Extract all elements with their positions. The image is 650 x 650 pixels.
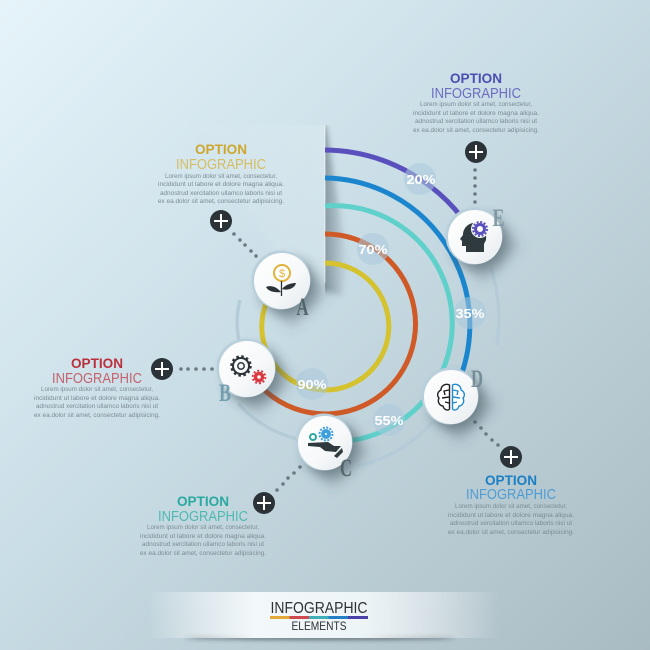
percent badge 90%: 90% — [298, 377, 327, 392]
text block E: INFOGRAPHIC — [431, 86, 521, 102]
text block C: INFOGRAPHIC — [158, 509, 248, 525]
plus button E — [465, 141, 487, 163]
text block B: adnostrud xercitation ullamco laboris nisi ut — [36, 403, 158, 410]
connector dots D — [473, 420, 500, 447]
banner colour bar — [270, 616, 368, 619]
icon: money plant: $ — [279, 268, 285, 280]
icon: gears — [232, 356, 265, 383]
node B — [216, 338, 296, 418]
letter E: E — [492, 205, 504, 232]
ring: blue — [325, 178, 470, 397]
percent badge 20%: 20% — [406, 172, 436, 187]
folded paper panel — [324, 125, 346, 296]
text block A: incididunt ut labore et dolore magna aliqua. — [158, 181, 284, 188]
text block A: adnostrud xercitation ullamco laboris nisi ut — [160, 190, 282, 197]
text block E: adnostrud xercitation ullamco laboris nisi ut — [415, 118, 537, 125]
text block E: OPTION — [450, 71, 502, 86]
node D — [422, 366, 498, 444]
ghost ring arcs — [237, 268, 499, 466]
text block C: adnostrud xercitation ullamco laboris nisi ut — [142, 541, 264, 548]
percent badge 70%: 70% — [358, 242, 388, 257]
banner title: INFOGRAPHIC — [270, 600, 368, 617]
text block B: Lorem ipsum dolor sit amet, consectetur, — [41, 386, 153, 393]
text block D: incididunt ut labore et dolore magna aliqua. — [448, 512, 574, 519]
letter D: D — [471, 366, 483, 393]
text block A: INFOGRAPHIC — [176, 157, 266, 173]
text block A: ex ea.dolor sit amet, consectetur adipisicing. — [158, 198, 284, 205]
text block B: INFOGRAPHIC — [52, 371, 142, 387]
text block E: Lorem ipsum dolor sit amet, consectetur, — [420, 101, 532, 108]
text block D: INFOGRAPHIC — [466, 487, 556, 503]
icon: brain — [438, 384, 464, 410]
ring: orange — [247, 234, 416, 414]
text block C: OPTION — [177, 494, 229, 509]
icon: hand with gears — [308, 428, 343, 458]
text block D: OPTION — [485, 473, 537, 488]
percent badge 35% — [454, 297, 486, 329]
text block A: Lorem ipsum dolor sit amet, consectetur, — [165, 173, 277, 180]
text block D — [448, 473, 574, 536]
percent badge 90% — [296, 368, 328, 400]
node C — [296, 414, 372, 490]
text block C: ex ea.dolor sit amet, consectetur adipisicing. — [140, 550, 266, 557]
text block B: incididunt ut labore et dolore magna aliqua. — [34, 395, 160, 402]
ring: purple — [325, 150, 475, 237]
text block D: adnostrud xercitation ullamco laboris nisi ut — [450, 520, 572, 527]
text block B — [34, 356, 160, 419]
text block E: ex ea.dolor sit amet, consectetur adipisicing. — [413, 127, 539, 134]
connector dots A — [232, 232, 258, 258]
text block E: incididunt ut labore et dolore magna aliqua. — [413, 110, 539, 117]
connector dots C — [275, 465, 302, 492]
node E — [446, 205, 522, 284]
text block E — [413, 71, 539, 134]
ring: yellow — [262, 263, 389, 390]
node A — [252, 250, 331, 330]
text block A — [158, 142, 284, 205]
text block D: Lorem ipsum dolor sit amet, consectetur, — [455, 503, 567, 510]
percent badge 35%: 35% — [456, 306, 485, 321]
plus button C — [253, 492, 275, 514]
text block B: OPTION — [71, 356, 123, 371]
text block C — [140, 494, 266, 557]
percent badge 55%: 55% — [374, 413, 404, 428]
plus button B — [151, 358, 173, 380]
banner subtitle: ELEMENTS — [292, 619, 346, 633]
icon: head with gear — [460, 220, 489, 252]
letter B: B — [219, 380, 231, 407]
percent badge 70% — [357, 233, 389, 265]
letter A: A — [296, 294, 308, 321]
connector dots B — [179, 367, 214, 371]
percent badge 55% — [373, 404, 405, 436]
ring: teal — [322, 206, 452, 442]
bottom banner — [148, 592, 500, 640]
text block C: incididunt ut labore et dolore magna aliqua. — [140, 533, 266, 540]
percent badge 20% — [404, 163, 436, 195]
text block A: OPTION — [195, 142, 247, 157]
text block D: ex ea.dolor sit amet, consectetur adipisicing. — [448, 529, 574, 536]
connector dots E — [473, 168, 477, 204]
letter C: C — [340, 455, 352, 482]
plus button A — [210, 210, 232, 232]
plus button D — [500, 446, 522, 468]
text block C: Lorem ipsum dolor sit amet, consectetur, — [147, 524, 259, 531]
text block B: ex ea.dolor sit amet, consectetur adipisicing. — [34, 412, 160, 419]
